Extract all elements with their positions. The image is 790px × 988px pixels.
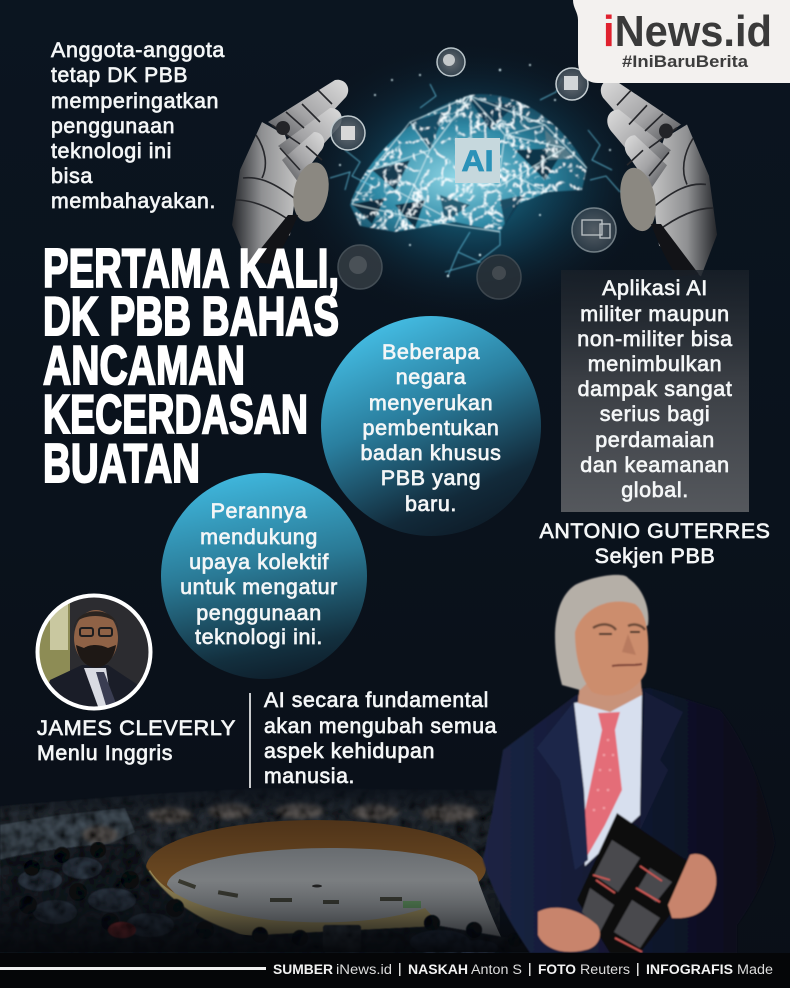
title: ANCAMAN <box>43 334 245 396</box>
callout bubble: new un body: PBB yang <box>381 466 481 490</box>
title: PERTAMA KALI, <box>43 237 339 299</box>
brain <box>330 64 620 277</box>
intro text: bisa <box>51 164 93 188</box>
antonio guterres photo <box>483 575 775 953</box>
icon: right robot hand <box>601 79 717 276</box>
callout bubble: new un body: baru. <box>405 492 457 516</box>
logo <box>573 0 790 83</box>
callout: guterres quote box <box>561 270 749 512</box>
logo: iNews.id <box>603 7 772 56</box>
seated delegates <box>0 842 530 956</box>
footer credits: Made <box>737 962 773 977</box>
title <box>43 237 339 494</box>
footer credits: iNews.id <box>336 962 392 977</box>
horseshoe table <box>145 820 505 945</box>
callout: guterres quote box: non-militer bisa <box>577 327 733 351</box>
ai brain illustration <box>232 40 717 320</box>
footer credits: FOTO <box>538 962 576 977</box>
callout bubble: collective role: mendukung <box>200 525 318 549</box>
cleverly quote: manusia. <box>264 764 355 788</box>
facial features <box>593 624 645 666</box>
callout bubble: new un body: pembentukan <box>363 416 499 440</box>
callout bubble: collective role: Perannya <box>211 499 307 523</box>
callout: guterres quote box: dampak sangat <box>578 377 732 401</box>
callout bubble: collective role: untuk mengatur <box>180 575 338 599</box>
security council chamber photo <box>0 782 530 956</box>
footer credits: Reuters <box>580 962 630 977</box>
intro text: Anggota-anggota <box>51 38 225 62</box>
callout bubble: new un body: negara <box>396 365 466 389</box>
intro text: membahayakan. <box>51 189 216 213</box>
callout bubble: collective role: teknologi ini. <box>195 625 323 649</box>
footer credits: NASKAH <box>408 962 468 977</box>
icon: left robot hand <box>232 80 348 264</box>
guterres name label <box>540 519 770 568</box>
footer credits: INFOGRAFIS <box>646 962 733 977</box>
james cleverly name label: Menlu Inggris <box>37 741 173 765</box>
james cleverly name label: JAMES CLEVERLY <box>37 716 236 740</box>
callout: guterres quote box: menimbulkan <box>588 352 722 376</box>
james cleverly name label <box>37 716 236 765</box>
guterres name label: ANTONIO GUTERRES <box>540 519 770 543</box>
council audience backdrop <box>0 788 500 952</box>
james cleverly portrait <box>36 594 152 712</box>
intro text <box>51 38 225 213</box>
guterres name label: Sekjen PBB <box>595 544 715 568</box>
callout bubble: new un body <box>321 316 541 536</box>
hair <box>555 575 648 690</box>
footer credits <box>0 953 790 988</box>
callout bubble: collective role: upaya kolektif <box>189 550 329 574</box>
cleverly quote <box>264 688 497 788</box>
callout: guterres quote box: dan keamanan <box>580 453 730 477</box>
footer credits: Anton S <box>471 962 522 977</box>
footer credits: SUMBER <box>273 962 333 977</box>
lapels <box>537 702 588 870</box>
intro text: memperingatkan <box>51 89 219 113</box>
icon: ai chip <box>455 138 500 183</box>
callout: guterres quote box: Aplikasi AI <box>602 276 708 300</box>
callout: guterres quote box: serius bagi <box>600 402 710 426</box>
intro text: tetap DK PBB <box>51 63 188 87</box>
face <box>575 602 648 696</box>
cleverly quote: AI secara fundamental <box>264 688 489 712</box>
logo: #IniBaruBerita <box>622 52 749 71</box>
callout: guterres quote box: militer maupun <box>580 302 730 326</box>
callout: guterres quote box: global. <box>621 478 689 502</box>
icon: ai chip: AI <box>462 145 494 178</box>
jacket <box>483 688 775 953</box>
callout bubble: collective role <box>161 473 367 679</box>
title: KECERDASAN <box>43 383 308 445</box>
cleverly quote: aspek kehidupan <box>264 739 435 763</box>
cleverly quote: akan mengubah semua <box>264 714 497 738</box>
neck <box>578 665 642 712</box>
callout: guterres quote box: perdamaian <box>595 428 715 452</box>
book <box>577 813 705 953</box>
callout bubble: collective role: penggunaan <box>196 601 322 625</box>
intro text: teknologi ini <box>51 139 172 163</box>
icon: network circles <box>331 48 616 299</box>
title: BUATAN <box>43 432 200 494</box>
callout bubble: new un body: menyerukan <box>369 391 493 415</box>
callout bubble: new un body: badan khusus <box>360 441 502 465</box>
necktie <box>583 712 622 860</box>
intro text: penggunaan <box>51 114 175 138</box>
hands <box>538 908 600 952</box>
callout bubble: new un body: Beberapa <box>382 340 480 364</box>
shirt <box>574 692 642 866</box>
title: DK PBB BAHAS <box>43 285 339 347</box>
